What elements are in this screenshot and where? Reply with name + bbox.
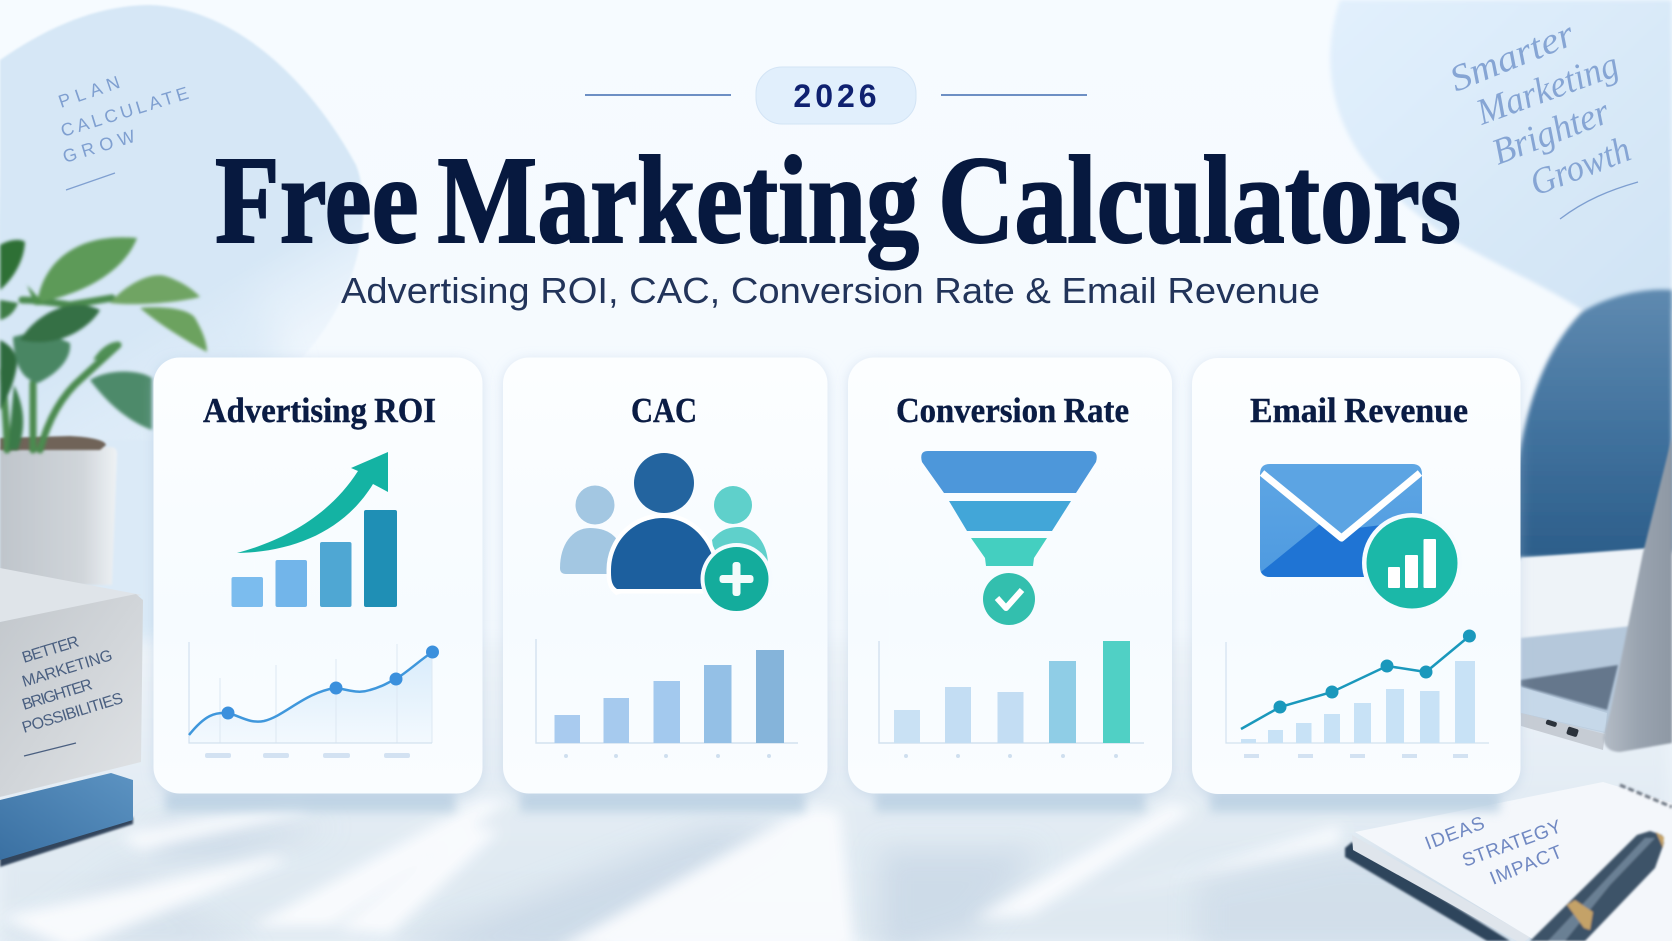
script note: smarter marketing: Brighter (1487, 91, 1616, 173)
notebook page (1355, 782, 1672, 941)
card heading: CAC (631, 391, 697, 430)
notebook text: IDEAS (1422, 812, 1490, 855)
year badge: 2026 (793, 78, 881, 114)
icon: funnel (921, 451, 1097, 625)
decorative note: plan calculate grow: CALCULATE (58, 81, 196, 141)
book text (20, 633, 127, 756)
book text: BETTER (20, 633, 83, 667)
desk surface (0, 640, 1672, 941)
white book top (0, 568, 142, 622)
white book spine (0, 594, 143, 797)
laptop keyboard (1521, 665, 1618, 710)
laptop front edge (1521, 713, 1605, 750)
leaves (0, 237, 207, 450)
laptop palm rest (1521, 687, 1607, 732)
card floor shadows (165, 792, 1500, 812)
notebook text: IMPACT (1487, 841, 1567, 890)
soil (0, 436, 106, 450)
card: Conversion Rate (848, 358, 1172, 794)
script note: smarter marketing: Smarter (1444, 13, 1580, 100)
stacked books (0, 568, 143, 867)
combo chart (1226, 630, 1489, 758)
background blob right (1330, 0, 1672, 315)
year badge (585, 67, 1087, 124)
notebook cover (1345, 842, 1510, 941)
card: Advertising ROI (154, 358, 482, 794)
script note: smarter marketing: Marketing (1470, 44, 1624, 134)
notebook text (1422, 812, 1567, 890)
pot (0, 447, 117, 585)
notebook spiral (1620, 785, 1672, 807)
line chart (189, 642, 439, 758)
bar chart (536, 639, 798, 758)
notebook pages edge (1352, 835, 1530, 941)
decorative note: plan calculate grow: PLAN (56, 70, 128, 112)
decorative note: plan calculate grow: GROW (60, 124, 143, 167)
icon: growth arrow (237, 452, 388, 553)
desk behind laptop (1521, 548, 1650, 642)
book text: BRIGHTER (20, 676, 96, 714)
blue book (0, 773, 133, 867)
notebook text: STRATEGY (1460, 816, 1566, 872)
blue chair (1510, 290, 1672, 558)
laptop (1521, 437, 1672, 752)
icon: customers with plus (560, 453, 772, 615)
notebook (1345, 782, 1672, 941)
laptop ports (1545, 719, 1579, 737)
laptop base (1521, 626, 1632, 735)
potted plant (0, 237, 207, 585)
laptop screen back (1603, 437, 1672, 752)
script note: smarter marketing: Growth (1525, 129, 1636, 204)
subtitle: Advertising ROI, CAC, Conversion Rate & Email Revenue (341, 270, 1320, 311)
card heading: Advertising ROI (203, 391, 436, 430)
book text: POSSIBILITIES (20, 690, 127, 737)
card heading: Conversion Rate (896, 391, 1129, 430)
book text: MARKETING (20, 647, 116, 691)
title: Free Marketing Calculators (215, 132, 1461, 270)
background blob left (0, 5, 363, 440)
icon: envelope with chart badge (1260, 464, 1462, 613)
pen (1530, 831, 1664, 941)
bar chart (879, 641, 1144, 758)
card heading: Email Revenue (1250, 391, 1468, 430)
card: CAC (503, 358, 828, 794)
script note: smarter marketing (1444, 13, 1638, 219)
icon: growth bars (232, 510, 397, 607)
decorative note: plan calculate grow (56, 70, 196, 190)
card: Email Revenue (1192, 358, 1520, 794)
